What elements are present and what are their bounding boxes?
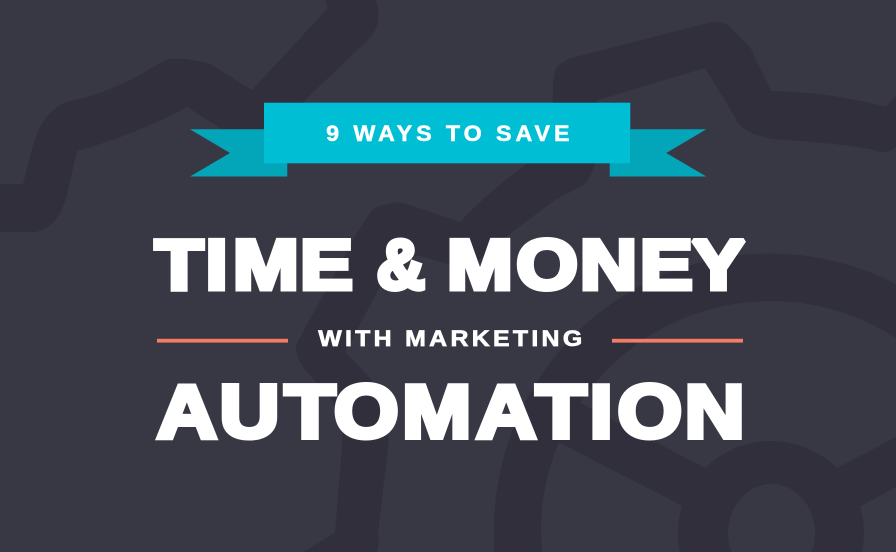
heading: automation: AUTOMATION	[157, 369, 745, 454]
gear hub	[678, 441, 864, 552]
ribbon main band	[264, 103, 630, 163]
heading: time and money: MONEY	[447, 225, 745, 304]
heading: time and money: TIME	[155, 225, 353, 304]
chain shape: top left	[0, 0, 378, 232]
gear rim	[494, 254, 896, 552]
gear spoke: right	[771, 437, 896, 533]
heading: time and money: &	[377, 225, 425, 304]
chain shape: centre and upper right	[296, 22, 896, 552]
gear hub hole	[728, 484, 815, 552]
gear spoke: left	[540, 392, 771, 533]
ribbon banner	[190, 103, 706, 176]
heading: time and money	[155, 225, 745, 304]
gear: bottom right	[494, 254, 896, 552]
ribbon tail: left	[190, 129, 287, 176]
divider: left	[157, 339, 288, 343]
divider: right	[612, 339, 743, 343]
ribbon tail: right	[610, 129, 706, 176]
ribbon text: 9 WAYS TO SAVE	[326, 120, 570, 146]
subheading: with marketing: WITH MARKETING	[318, 326, 582, 351]
